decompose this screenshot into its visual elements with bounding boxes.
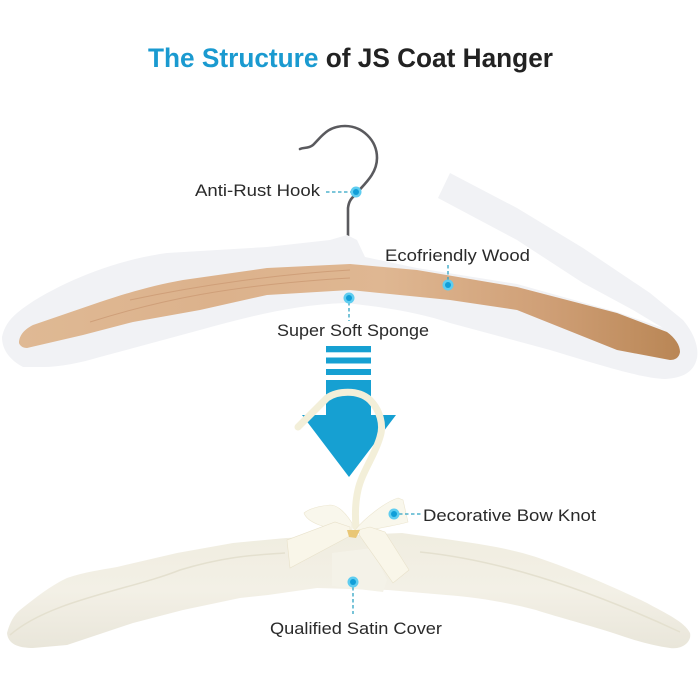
label: anti-rust hook — [195, 182, 362, 200]
icon: bow knot — [287, 498, 409, 583]
label: ecofriendly wood: Ecofriendly Wood — [385, 247, 530, 265]
satin padded body — [7, 533, 690, 648]
label: decorative bow knot: Decorative Bow Knot — [423, 507, 596, 525]
arrow — [302, 346, 396, 477]
title: The Structure of JS Coat Hanger — [148, 43, 553, 73]
wood grain — [90, 270, 350, 322]
icon: metal hook — [300, 126, 377, 236]
wooden core — [19, 264, 680, 360]
foam and wood hanger — [2, 126, 697, 379]
foam sponge wrap — [2, 173, 697, 379]
label: super soft sponge: Super Soft Sponge — [277, 322, 429, 340]
satin folds — [10, 552, 680, 635]
label: ecofriendly wood — [385, 247, 530, 290]
icon: satin hook — [298, 392, 382, 527]
label: qualified satin cover — [270, 576, 443, 638]
satin hanger — [7, 392, 690, 648]
label: qualified satin cover: Qualified Satin Cover — [270, 620, 443, 638]
label: anti-rust hook: Anti-Rust Hook — [195, 182, 321, 200]
centre panel — [332, 548, 387, 592]
label: super soft sponge — [277, 292, 429, 340]
